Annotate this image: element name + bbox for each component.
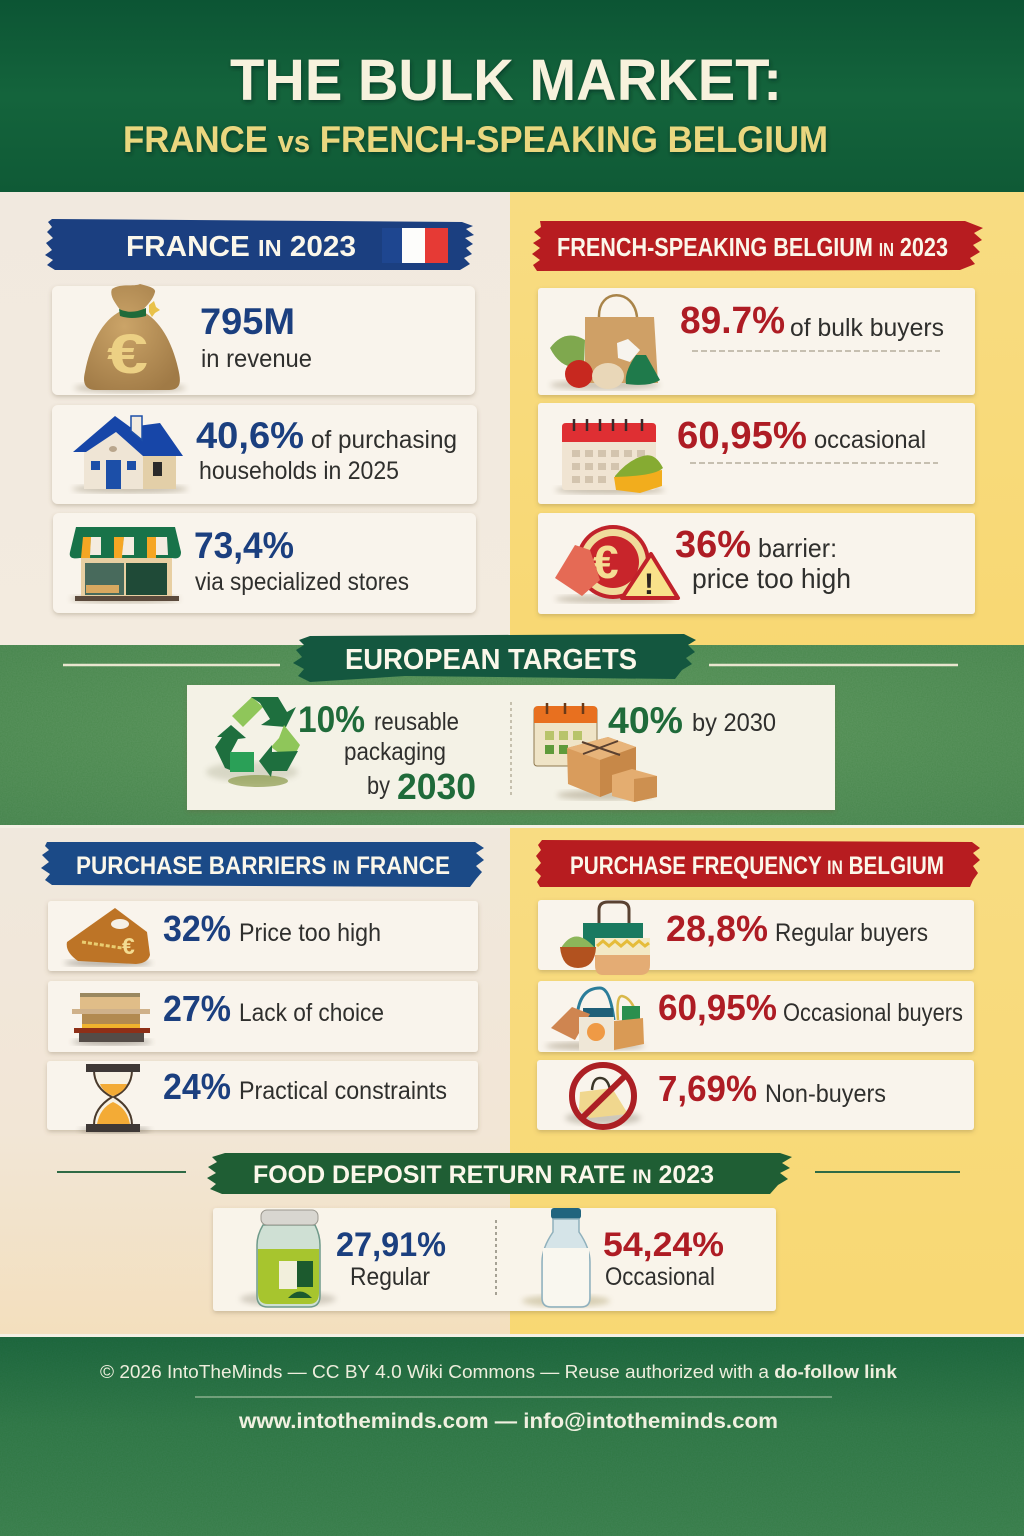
icon: price tag: €: [122, 933, 135, 959]
text: 10% reusable packaging: [298, 699, 476, 807]
card: price barrier: [538, 513, 975, 614]
card: occasional buyers: [538, 981, 974, 1052]
card: targets: [187, 685, 835, 810]
icon: price tag: [64, 908, 152, 966]
panel: purchase barriers in France: [41, 842, 484, 1133]
text: 40% by 2030: by 2030: [692, 709, 776, 737]
text: 32%: Price too high: [239, 919, 381, 947]
text: 28,8%: [666, 908, 928, 949]
icon: recycle: [206, 697, 300, 787]
text: 89.7%: of bulk buyers: [790, 314, 944, 342]
icon: no bag: [565, 1065, 641, 1127]
heading ribbon: France in 2023: [45, 219, 474, 270]
text: 60,95%: occasional: [814, 426, 926, 454]
icon: French flag: [382, 228, 448, 263]
text: 28,8%: Regular buyers: [775, 919, 928, 947]
icon: money bag: €: [107, 322, 148, 385]
text: 28,8%: 28,8%: [666, 908, 768, 949]
text: 32%: 32%: [163, 908, 231, 949]
text: 24%: 24%: [163, 1066, 231, 1107]
text: 60,95%: [677, 415, 938, 463]
text: 36%: barrier:: [758, 533, 837, 563]
heading ribbon: European targets: [293, 634, 696, 682]
icon: calendar with basket: [555, 419, 665, 494]
icon: hourglass: [79, 1064, 151, 1133]
text: 795M: in revenue: [201, 345, 312, 373]
icon: bags and bowl: [560, 902, 650, 975]
text: 10% reusable packaging: reusable: [374, 708, 459, 736]
text: 10% reusable packaging: packaging: [344, 738, 446, 766]
heading ribbon: Belgium in 2023: [532, 221, 983, 271]
subtitle: FRANCE vs FRENCH-SPEAKING BELGIUM: [123, 119, 828, 160]
panel: purchase frequency in Belgium: [535, 840, 980, 1130]
heading ribbon: France in 2023: FRANCE IN 2023: [126, 231, 356, 263]
text: 7,69%: [658, 1068, 886, 1109]
panel: France in 2023: [45, 219, 477, 613]
icon: euro coin and warning: [555, 525, 678, 603]
icon: assorted bags: [545, 988, 645, 1051]
card: regular buyers: [538, 900, 974, 975]
text: 73,4%: 73,4%: [194, 525, 294, 566]
footer: [0, 1334, 1024, 1536]
text: 27,91% Regular: 27,91%: [336, 1226, 446, 1264]
icon: calendar and boxes: [534, 703, 657, 802]
text: 40% by 2030: 40%: [608, 700, 683, 741]
text: 89.7%: [680, 300, 944, 351]
heading ribbon: frequency: PURCHASE FREQUENCY IN BELGIUM: [570, 852, 944, 880]
text: 24%: [163, 1066, 447, 1107]
card: price too high: [48, 901, 478, 971]
title: THE BULK MARKET:: [230, 48, 782, 113]
text: 32%: [163, 908, 381, 949]
card: specialized stores: [53, 513, 476, 613]
text: 60,95%: [658, 987, 963, 1028]
heading ribbon: food deposit: FOOD DEPOSIT RETURN RATE IN 2023: [253, 1161, 714, 1189]
text: 60,95%: 60,95%: [658, 987, 777, 1028]
card: occasional: [538, 403, 975, 504]
text: 10% reusable packaging: 10%: [298, 699, 365, 740]
card: return rates: [213, 1208, 776, 1311]
heading ribbon: barriers: PURCHASE BARRIERS IN FRANCE: [76, 852, 450, 880]
icon: money bag: [74, 284, 186, 393]
text: 10% reusable packaging: by: [367, 772, 390, 800]
icon: shelf: [72, 993, 152, 1045]
text: 27%: [163, 988, 384, 1029]
copyright line: © 2026 IntoTheMinds — CC BY 4.0 Wiki Commons — Reuse authorized with a do-follow link: [100, 1362, 898, 1382]
icon: euro coin and warning: !: [644, 568, 654, 601]
heading ribbon: food deposit: [207, 1153, 792, 1194]
text: 89.7%: 89.7%: [680, 300, 785, 342]
text: 60,95%: Occasional buyers: [783, 999, 963, 1027]
text: 54,24% Occasional: Occasional: [605, 1263, 715, 1291]
card: non-buyers: [537, 1060, 974, 1130]
icon: grocery bag: [550, 295, 660, 390]
card: households: [52, 405, 477, 504]
text: 73,4%: via specialized stores: [195, 568, 409, 596]
panel: French-speaking Belgium in 2023: [532, 221, 983, 614]
text: 795M: [200, 301, 312, 373]
text: 60,95%: 60,95%: [677, 415, 807, 457]
text: 40,6%: [196, 415, 457, 485]
text: 73,4%: [194, 525, 409, 596]
card: revenue: [52, 284, 475, 395]
text: 24%: Practical constraints: [239, 1077, 447, 1105]
text: 795M: 795M: [200, 301, 295, 342]
card: lack of choice: [48, 981, 478, 1052]
text: 54,24% Occasional: 54,24%: [603, 1226, 724, 1264]
text: 36%: price too high: [692, 563, 851, 594]
heading ribbon: barriers: [41, 842, 484, 887]
card: practical constraints: [47, 1061, 478, 1133]
text: 7,69%: Non-buyers: [765, 1080, 886, 1108]
background panels: [0, 192, 1024, 1337]
text: 10% reusable packaging: 2030: [397, 766, 476, 807]
header band: [0, 0, 1024, 192]
text: 27,91% Regular: [336, 1226, 446, 1291]
text: 36%: [675, 524, 851, 594]
icon: milk bottle: [522, 1208, 610, 1307]
text: 40,6%: of purchasing: [311, 426, 457, 454]
text: 27%: 27%: [163, 988, 231, 1029]
icon: euro coin and warning: €: [593, 536, 619, 588]
icon: house: [72, 416, 188, 493]
icon: jar: [240, 1210, 336, 1307]
text: 27,91% Regular: Regular: [350, 1263, 430, 1291]
heading ribbon: European targets: EUROPEAN TARGETS: [345, 644, 637, 676]
text: 36%: 36%: [675, 524, 751, 566]
text: 40,6%: households in 2025: [199, 457, 399, 485]
text: 54,24% Occasional: [603, 1226, 724, 1291]
heading ribbon: frequency: [535, 840, 980, 887]
panel: European targets: [63, 634, 958, 810]
contact line: www.intotheminds.com — info@intotheminds.com: [238, 1410, 778, 1433]
icon: shop front: [70, 527, 181, 603]
heading ribbon: Belgium in 2023: FRENCH-SPEAKING BELGIUM IN 2023: [557, 232, 948, 262]
text: 40% by 2030: [608, 700, 776, 741]
text: 40,6%: 40,6%: [196, 415, 304, 456]
panel: food deposit return rate: [57, 1153, 960, 1311]
card: bulk buyers: [538, 288, 975, 395]
text: 7,69%: 7,69%: [658, 1068, 757, 1109]
text: 27%: Lack of choice: [239, 999, 384, 1027]
